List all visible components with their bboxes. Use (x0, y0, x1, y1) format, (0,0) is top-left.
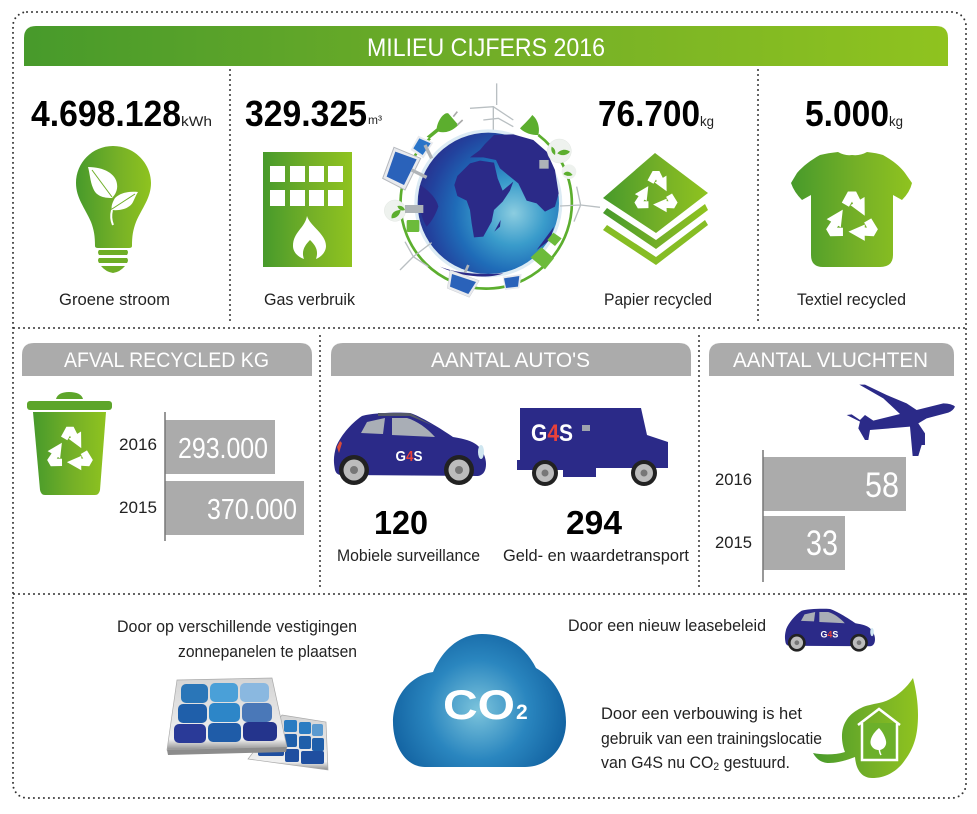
title: MILIEU CIJFERS 2016 (367, 34, 605, 62)
leaf top (520, 115, 539, 135)
globe illustration (383, 83, 600, 297)
bar chart: vluchten: 33 (806, 524, 838, 563)
text: verbouwing: Door een verbouwing is het (601, 704, 802, 723)
solar panels bottom (447, 265, 522, 297)
continents (419, 134, 559, 276)
bar chart: afval: 370.000 (207, 494, 297, 526)
car count (337, 504, 480, 565)
icon: solar panels (167, 678, 328, 770)
panel: gas verbruik (245, 93, 382, 309)
value: kWh: 4.698.128 (31, 93, 181, 134)
icon: building with flame (263, 152, 352, 267)
icon: CO2 cloud (393, 634, 566, 767)
van count: 294 (566, 504, 623, 541)
text: verbouwing: gebruik van een trainingslocatie (601, 729, 822, 748)
panel: aantal vluchten (709, 343, 955, 582)
bar chart: vluchten: 58 (865, 466, 899, 505)
heading (331, 343, 691, 376)
heading (22, 343, 312, 376)
icon: CO2 cloud: 2 (516, 701, 528, 724)
wind turbine top (470, 83, 513, 135)
panel: groene stroom (31, 93, 212, 309)
panel: textiel recycled (791, 93, 912, 309)
bar chart: vluchten: 2015 (715, 533, 752, 552)
car count: Mobiele surveillance (337, 546, 480, 565)
label: Gas verbruik (264, 290, 355, 309)
bar chart: afval: 293.000 (178, 433, 268, 465)
icon: van (517, 408, 668, 486)
panel: aantal auto's (331, 343, 691, 565)
batteries (407, 220, 562, 269)
text: verbouwing: gestuurd. (719, 753, 790, 772)
text: zonnepanelen (117, 617, 357, 661)
van count: Geld- en waardetransport (503, 546, 689, 565)
plug (427, 113, 458, 138)
text: leasebeleid: Door een nieuw leasebeleid (568, 616, 766, 635)
icon: paper stack (603, 153, 708, 265)
icon: leaf with house (813, 678, 918, 778)
panel: afval recycled (22, 343, 312, 541)
icon: CO2 cloud: CO (443, 681, 515, 728)
bar chart: vluchten: 2016 (715, 470, 752, 489)
panel: papier recycled (598, 93, 714, 309)
globe sphere (414, 129, 562, 277)
label: Groene stroom (59, 290, 170, 309)
bar chart: afval (119, 412, 304, 541)
text: verbouwing: van G4S nu CO (601, 753, 721, 772)
title bar (24, 26, 948, 66)
bar chart: afval: 2016 (119, 435, 157, 454)
icon: small car: G4S (821, 629, 838, 639)
heading: AANTAL VLUCHTEN (733, 349, 928, 372)
text: verbouwing (601, 704, 822, 773)
green ring (401, 135, 572, 289)
solar panels left (383, 136, 433, 190)
car count: 120 (374, 504, 428, 541)
bar chart: vluchten (715, 450, 906, 582)
icon: car: G4S (396, 448, 422, 465)
value: textile kg: kg (889, 113, 903, 129)
icon: t-shirt (791, 152, 912, 267)
value: textile kg: 5.000 (805, 93, 889, 134)
value: paper kg: 76.700 (598, 93, 700, 134)
van count (503, 504, 689, 565)
heading (709, 343, 954, 376)
text: zonnepanelen: Door op verschillende vestigingen (117, 617, 357, 636)
text: verbouwing: 2 (713, 761, 719, 773)
label: Papier recycled (604, 290, 712, 309)
bar chart: afval: 2015 (119, 498, 157, 517)
icon: car (334, 413, 486, 485)
heading: AFVAL RECYCLED KG (64, 349, 269, 372)
icon: green bulb with leaves (76, 146, 151, 273)
turbines side (400, 187, 600, 270)
icon: recycle bin (27, 392, 112, 495)
value: kWh: kWh (181, 113, 212, 129)
icon: van: G4S (531, 420, 573, 447)
text: zonnepanelen: zonnepanelen te plaatsen (178, 642, 357, 661)
value: m3: m³ (368, 113, 382, 127)
value: paper kg: kg (700, 113, 714, 129)
icon: small car (785, 609, 875, 652)
label: Textiel recycled (797, 290, 906, 309)
heading: AANTAL AUTO'S (431, 349, 590, 372)
value: m3: 329.325 (245, 93, 367, 134)
bulbs (384, 200, 406, 221)
icon: airplane (847, 385, 955, 456)
